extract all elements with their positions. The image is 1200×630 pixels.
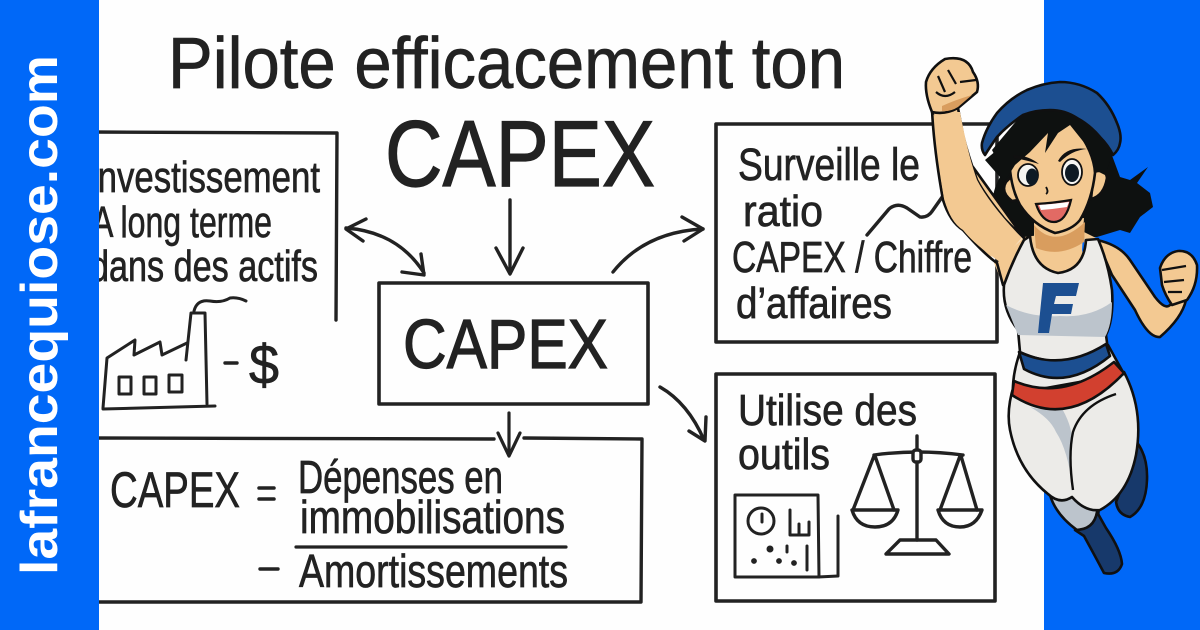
blue belt	[1019, 344, 1110, 378]
eyes	[1018, 159, 1082, 186]
right arm	[1097, 240, 1186, 337]
mascot character	[926, 58, 1197, 574]
icon: dollar cost: $	[249, 333, 279, 396]
panel: formula: CAPEX	[110, 462, 240, 518]
mouth	[1036, 200, 1071, 222]
right blue band	[1044, 0, 1200, 630]
tank shading	[1006, 302, 1112, 337]
leg shading	[1030, 405, 1073, 490]
panel: ratio: d’affaires	[736, 279, 892, 328]
raised arm fill	[934, 112, 1022, 262]
arrow: capex to formula	[498, 413, 520, 456]
panel: tools	[716, 374, 995, 601]
panel: ratio	[716, 124, 997, 342]
eyebrows	[1013, 148, 1087, 164]
right fist	[1160, 251, 1197, 305]
panel: formula: Amortissements	[299, 545, 568, 597]
front lower leg	[1050, 495, 1100, 530]
rear boot	[1116, 440, 1147, 517]
panel: tools: outils	[738, 430, 830, 479]
minus sign	[260, 567, 278, 571]
hair fringe	[992, 106, 1113, 183]
left brand band	[0, 0, 99, 630]
panel: definition: dans des actifs	[90, 242, 318, 291]
arrow: definition to capex	[346, 219, 424, 275]
panel: formula: Dépenses en	[298, 451, 503, 503]
hips between belts	[1013, 345, 1124, 394]
left brand band: lafrancequiose.com	[11, 55, 69, 575]
icon: dashboard	[735, 495, 838, 577]
title: Pilote efficacement ton	[168, 24, 845, 104]
panel: definition: Investissement	[88, 153, 320, 202]
front boot	[1075, 512, 1122, 574]
nose	[1046, 187, 1048, 194]
teeth	[1039, 202, 1069, 210]
trend curve	[867, 193, 945, 235]
red belt	[1012, 362, 1124, 409]
ears	[1004, 171, 1107, 201]
raised fist	[926, 58, 978, 113]
face	[1010, 120, 1095, 233]
fist shadow	[942, 95, 972, 111]
beret	[982, 82, 1121, 155]
panel: ratio: ratio	[743, 187, 823, 236]
hair back	[985, 110, 1153, 240]
icon: factory	[103, 298, 246, 409]
tank letter F	[1038, 283, 1079, 333]
arrow: capex to tools	[660, 387, 706, 441]
raised arm	[932, 108, 1024, 285]
neck shadow	[1034, 222, 1085, 252]
right fist fingers	[1162, 266, 1186, 292]
neck	[1030, 218, 1088, 275]
panel: central capex box	[379, 283, 648, 404]
fist fingers	[936, 70, 976, 96]
equals sign	[259, 488, 274, 499]
icon: dollar cost	[225, 333, 279, 396]
panel: tools: Utilise des	[738, 386, 917, 435]
icon: balance scale	[852, 436, 982, 554]
panel: ratio: CAPEX / Chiffre	[732, 233, 972, 282]
panel: formula: immobilisations	[300, 491, 565, 543]
arrow: title down to capex	[496, 200, 523, 274]
torso skin behind tank	[997, 232, 1100, 300]
panel: definition: A long terme	[92, 198, 272, 247]
title	[168, 24, 845, 206]
fraction bar	[296, 545, 566, 549]
arrow: capex to ratio	[613, 217, 703, 272]
legs	[1009, 372, 1138, 510]
panel: formula	[90, 413, 642, 602]
tank top	[1004, 236, 1112, 362]
panel: central capex box: CAPEX	[403, 305, 608, 383]
leg centre line	[1070, 394, 1116, 490]
panel: definition	[88, 132, 337, 409]
title: CAPEX	[385, 101, 655, 206]
panel: ratio: Surveille le	[738, 139, 920, 190]
